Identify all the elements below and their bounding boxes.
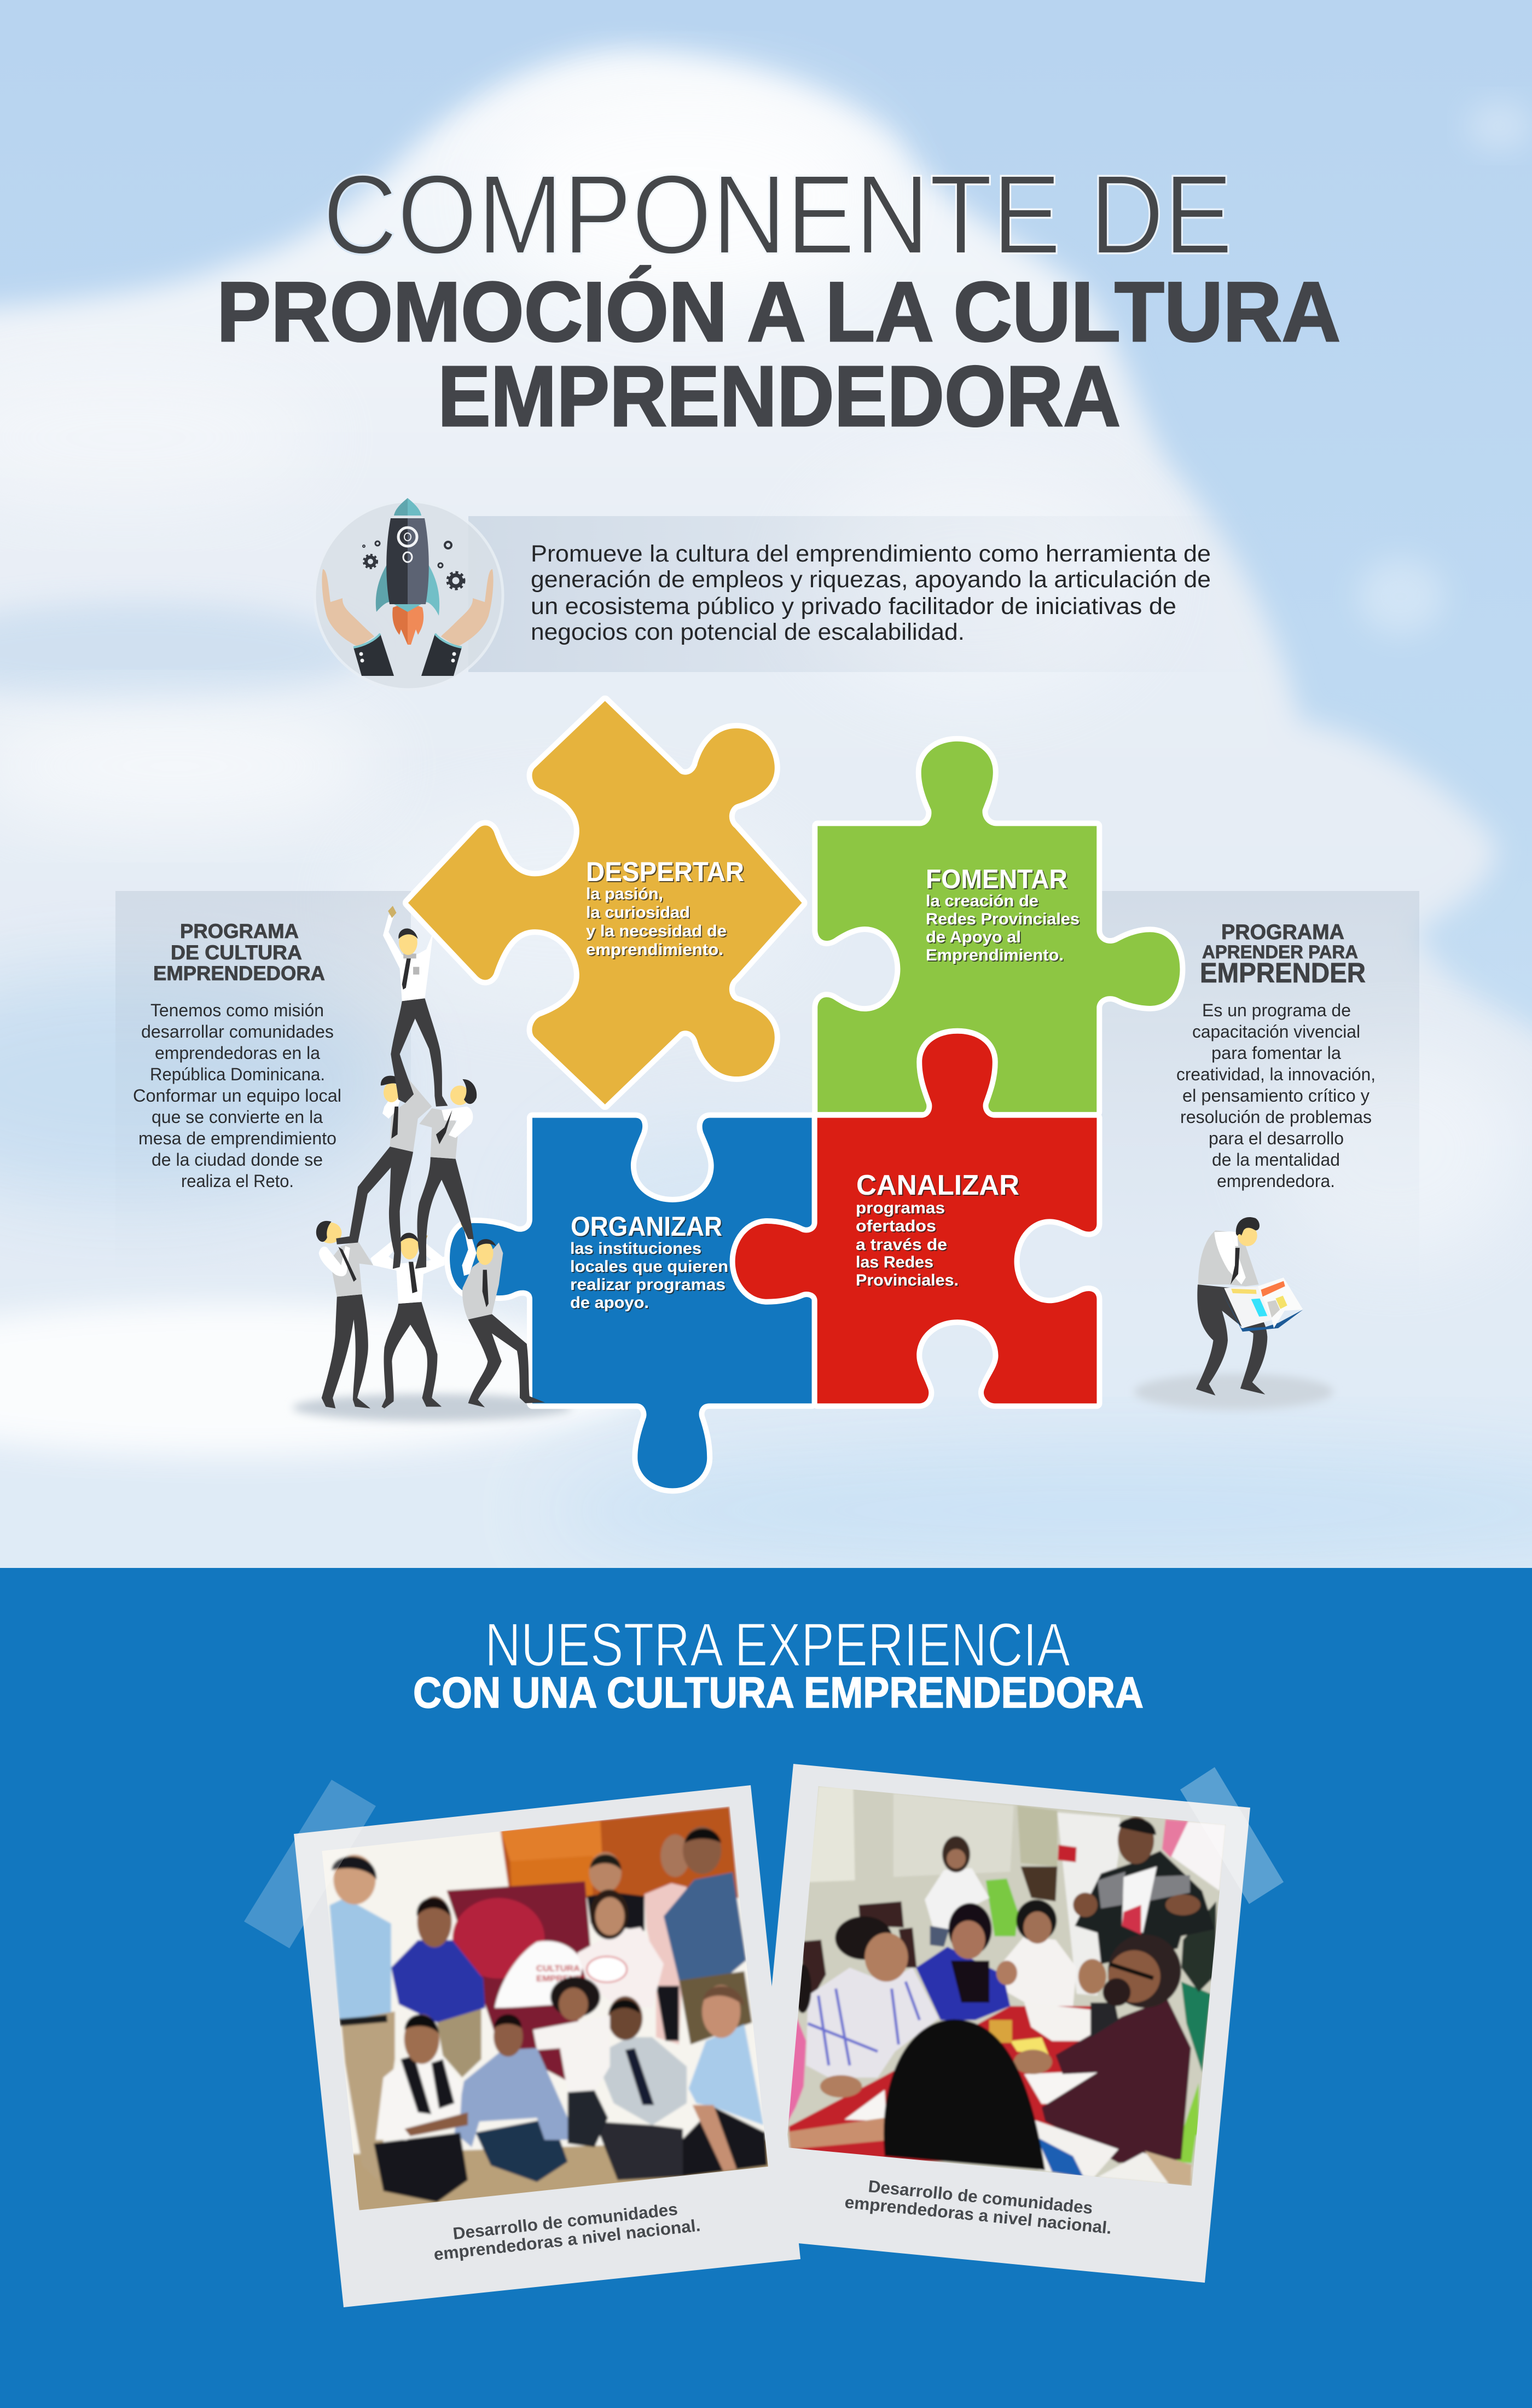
puzzle text: fomentar: la creación de xyxy=(926,892,1038,910)
back row men xyxy=(587,1892,645,1931)
title: EMPRENDEDORA xyxy=(438,349,1121,444)
puzzle piece: red canalizar xyxy=(735,1034,1096,1403)
photo: group portrait: CULTURA xyxy=(536,1964,580,1973)
panel heading left: PROGRAMA xyxy=(180,920,299,942)
puzzle piece: green fomentar xyxy=(817,742,1180,1112)
panel body text right: resolución de problemas xyxy=(1180,1107,1372,1127)
puzzle text: despertar: DESPERTAR xyxy=(586,856,744,887)
lanyard woman xyxy=(533,2015,610,2092)
panel: programa de cultura emprendedora xyxy=(115,891,411,1285)
puzzle text: despertar xyxy=(586,856,744,959)
illustration: man reading book xyxy=(1196,1217,1303,1396)
figure: bottom right man xyxy=(461,1218,545,1408)
title: PROMOCIÓN A LA CULTURA xyxy=(217,264,1340,359)
panel body text left: desarrollar comunidades xyxy=(141,1022,334,1041)
panel heading left: EMPRENDEDORA xyxy=(153,962,325,985)
panel heading left xyxy=(153,920,325,985)
puzzle text: despertar: y la necesidad de xyxy=(586,922,727,940)
panel body text right: el pensamiento crítico y xyxy=(1182,1086,1369,1105)
intro text: un ecosistema público y privado facilitador de iniciativas de xyxy=(531,593,1176,620)
panel body text right: Es un programa de xyxy=(1202,1000,1351,1020)
table xyxy=(788,2006,1118,2163)
figure: top man xyxy=(383,906,448,1107)
panel body text left xyxy=(133,1000,341,1191)
blue blouse woman xyxy=(916,1947,1010,2020)
photo: group portrait xyxy=(306,1795,787,2228)
panel heading right: EMPRENDER xyxy=(1200,957,1366,988)
intro text: negocios con potencial de escalabilidad. xyxy=(531,619,965,645)
panel body text left: mesa de emprendimiento xyxy=(138,1128,336,1148)
title: COMPONENTE DE xyxy=(323,152,1233,277)
tall man light blue xyxy=(329,1898,391,2021)
panel body text left: de la ciudad donde se xyxy=(152,1150,323,1170)
panel body text right xyxy=(1176,1000,1376,1191)
puzzle text: despertar: la pasión, xyxy=(586,885,663,903)
ground shadow: reader xyxy=(1134,1374,1333,1410)
ground shadow: team xyxy=(293,1394,572,1421)
puzzle text: organizar: las instituciones xyxy=(570,1240,701,1258)
grey shirt man xyxy=(595,2121,683,2180)
puzzle text: canalizar: a través de xyxy=(856,1236,947,1254)
panel: programa aprender para emprender xyxy=(1100,891,1419,1307)
front man xyxy=(1042,1999,1191,2163)
puzzle xyxy=(408,701,1180,1488)
photo caption right: emprendedoras a nivel nacional. xyxy=(844,2192,1112,2238)
photo card: left xyxy=(294,1785,800,2307)
photo: table workshop xyxy=(787,1786,1226,2186)
puzzle text: canalizar: CANALIZAR xyxy=(856,1170,1019,1201)
title xyxy=(217,152,1340,444)
figure: bottom middle man xyxy=(370,1232,444,1409)
panel heading right: APRENDER PARA xyxy=(1202,942,1358,963)
panel body text right: de la mentalidad xyxy=(1212,1150,1340,1170)
panel body text right: capacitación vivencial xyxy=(1192,1022,1360,1041)
puzzle piece: yellow despertar xyxy=(408,701,802,1104)
puzzle text: canalizar: programas xyxy=(856,1199,945,1217)
puzzle text: despertar: la curiosidad xyxy=(586,904,690,922)
standing man xyxy=(1075,1851,1215,1964)
puzzle text: fomentar: Emprendimiento. xyxy=(926,946,1064,964)
white sweater woman xyxy=(998,1936,1077,2006)
pink woman xyxy=(786,2015,806,2125)
panel body text left: que se convierte en la xyxy=(152,1107,323,1127)
front woman hair xyxy=(884,2019,1045,2170)
bottom paper and arm xyxy=(788,2118,886,2149)
puzzle text: organizar: realizar programas xyxy=(570,1276,726,1294)
panel body text left: República Dominicana. xyxy=(150,1064,325,1084)
plaid man xyxy=(475,2118,568,2182)
figure: reader xyxy=(1196,1217,1267,1396)
puzzle text: canalizar: las Redes xyxy=(856,1253,933,1271)
striped blouse woman xyxy=(806,1967,939,2077)
right seated man xyxy=(671,2107,767,2177)
photo caption right: Desarrollo de comunidades xyxy=(867,2177,1094,2218)
photo: group portrait: EMPRENDEDOR xyxy=(536,1974,609,1984)
puzzle text: canalizar: ofertados xyxy=(856,1217,936,1235)
photo card: right xyxy=(747,1764,1255,2283)
puzzle text: organizar xyxy=(570,1211,728,1312)
puzzle text: fomentar: FOMENTAR xyxy=(926,865,1067,894)
blue blouse woman xyxy=(437,2008,481,2077)
intro text: generación de empleos y riquezas, apoyando la articulación de xyxy=(531,566,1211,593)
puzzle text: fomentar xyxy=(926,865,1080,964)
section heading: NUESTRA EXPERIENCIA xyxy=(485,1611,1070,1679)
panel heading right: PROGRAMA xyxy=(1221,921,1344,944)
blue shirt man xyxy=(664,1872,746,1981)
photo caption left: emprendedoras a nivel nacional. xyxy=(433,2215,701,2264)
panel body text left: Conformar un equipo local xyxy=(133,1086,341,1105)
white tee woman xyxy=(577,1927,664,2008)
icon: rocket held by hands xyxy=(315,498,503,690)
puzzle text: fomentar: de Apoyo al xyxy=(926,928,1021,946)
panel body text left: realiza el Reto. xyxy=(181,1171,294,1191)
panel body text right: creatividad, la innovación, xyxy=(1176,1064,1376,1084)
seated woman xyxy=(374,2133,468,2202)
puzzle text: organizar: ORGANIZAR xyxy=(571,1211,722,1242)
panel heading left: DE CULTURA xyxy=(171,941,302,964)
standing woman xyxy=(925,1868,989,1929)
section heading xyxy=(413,1611,1144,1717)
sky background with clouds xyxy=(0,0,1532,1603)
figure: bottom left man xyxy=(316,1221,373,1409)
figure: middle left man xyxy=(336,1060,432,1269)
panel body text right: para fomentar la xyxy=(1211,1043,1341,1063)
intro text xyxy=(531,541,1211,645)
photo caption left: Desarrollo de comunidades xyxy=(452,2199,678,2243)
banner xyxy=(446,1882,591,2081)
icon: open book xyxy=(1221,1277,1303,1332)
tape: left xyxy=(244,1780,376,1948)
puzzle text: canalizar: Provinciales. xyxy=(856,1271,959,1289)
panel body text left: Tenemos como misión xyxy=(150,1000,324,1020)
puzzle piece: blue organizar xyxy=(450,1118,812,1488)
section heading: CON UNA CULTURA EMPRENDEDORA xyxy=(413,1668,1144,1717)
panel body text right: emprendedora. xyxy=(1217,1171,1335,1191)
panel body text right: para el desarrollo xyxy=(1209,1128,1344,1148)
figure: middle right man xyxy=(415,1079,477,1269)
panel body text left: emprendedoras en la xyxy=(155,1043,320,1063)
puzzle text: organizar: de apoyo. xyxy=(570,1294,649,1312)
puzzle text: fomentar: Redes Provinciales xyxy=(926,910,1080,928)
puzzle text: canalizar xyxy=(856,1170,1019,1289)
panel heading right xyxy=(1200,921,1366,988)
puzzle text: despertar: emprendimiento. xyxy=(586,941,723,959)
section: nuestra experiencia xyxy=(0,1568,1532,2408)
illustration: human pyramid team xyxy=(316,906,545,1409)
puzzle text: organizar: locales que quieren xyxy=(570,1258,728,1276)
tape: right xyxy=(1180,1767,1284,1904)
intro panel xyxy=(315,498,1278,690)
intro text: Promueve la cultura del emprendimiento como herramienta de xyxy=(531,541,1211,567)
